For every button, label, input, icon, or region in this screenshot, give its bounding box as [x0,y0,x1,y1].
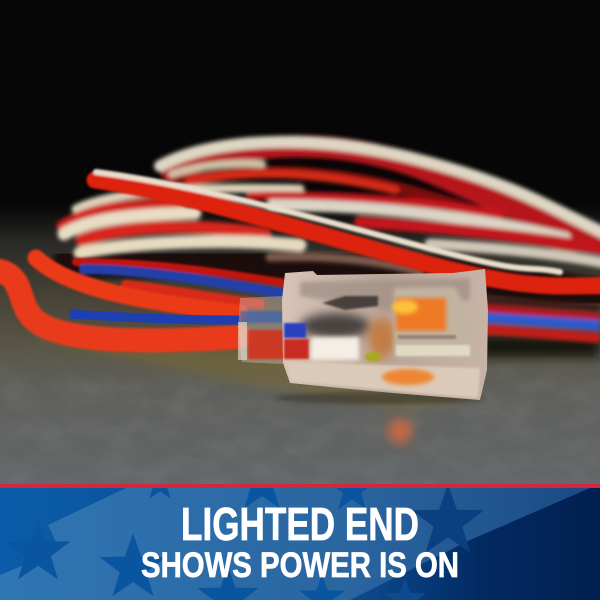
dark area under coil [70,261,600,296]
printed text smudge on prong [398,335,456,339]
lighted connector end [238,269,488,400]
banner stars [7,488,484,600]
LED hot spot [392,300,418,314]
cable coil [0,142,600,340]
blue stripe of front cable [70,314,240,320]
main front cable with white stripe [95,172,600,286]
banner brush band [0,488,590,600]
floor warm reflection [0,270,480,410]
lower orange glow [382,369,434,385]
blurred back cables [62,142,600,272]
connector reflection on floor [388,418,412,444]
blue inner wire [284,323,306,338]
prong block [394,287,472,357]
green-yellow component [365,352,381,362]
banner red line [0,484,600,488]
title: lighted end: LIGHTED END [181,498,419,550]
connector shadow [275,392,485,404]
subtitle: shows power is on: SHOWS POWER IS ON [141,546,459,585]
white inner block [311,337,359,360]
lower housing tone [286,362,480,398]
rear orange tone [368,318,396,358]
banner background [0,488,600,600]
red inner wire [284,339,309,359]
clear housing [282,269,488,400]
orange glow [396,298,446,331]
upper housing tone [300,278,470,312]
floor right dark shadow [480,335,600,357]
dark component [322,296,378,310]
inner dark area [300,313,370,339]
infographic: lighted end extension cord [0,131,600,600]
floor texture [46,384,220,484]
lower red and blue cables [0,258,290,340]
lower prong highlight [396,345,470,356]
cable segment right of connector [480,300,600,338]
cord collar [238,296,284,364]
